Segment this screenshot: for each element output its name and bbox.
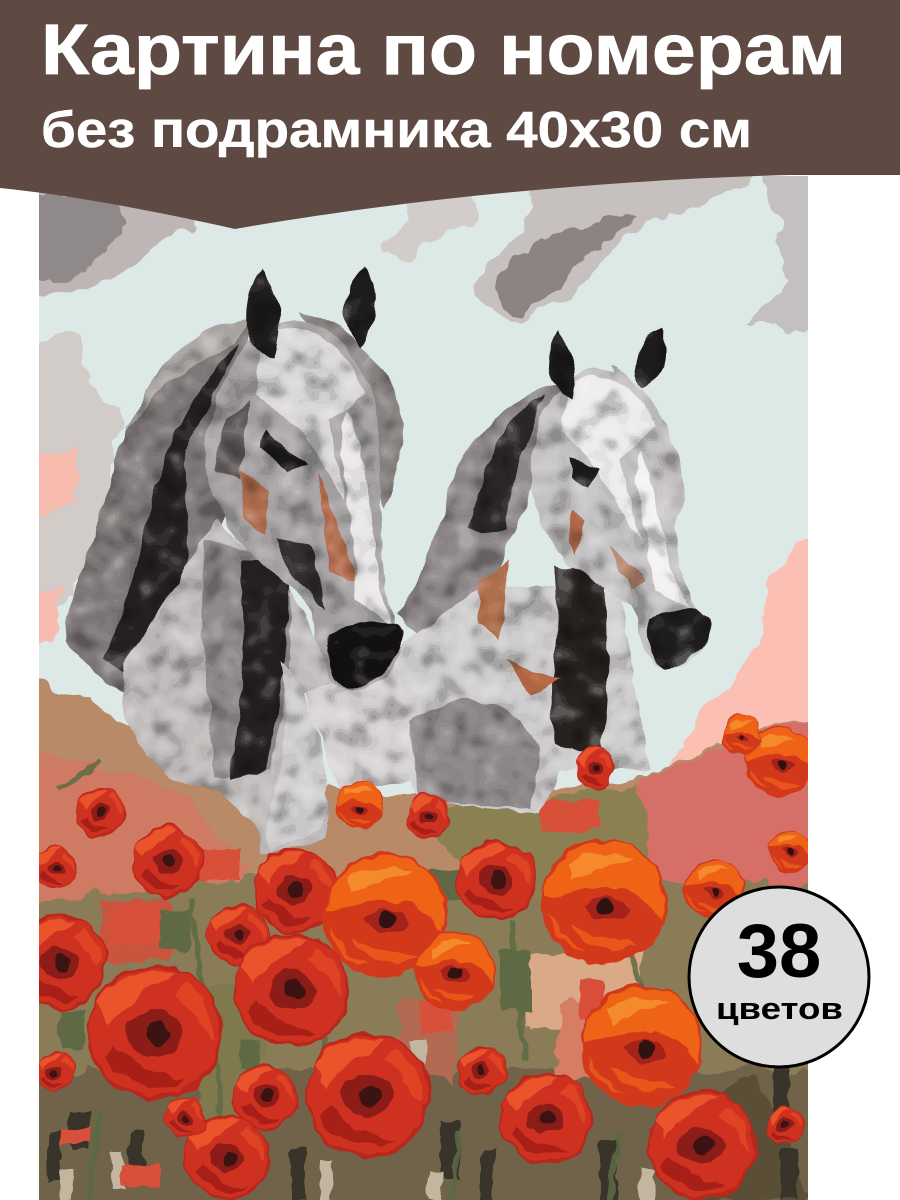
- badge: 38 colours: [689, 887, 869, 1067]
- right horse head: [532, 328, 711, 670]
- sky: [39, 176, 808, 798]
- left horse mane: [65, 310, 405, 700]
- title: Картина по номерам: [41, 11, 846, 90]
- pink horizon: [668, 538, 808, 767]
- meadow: [25, 680, 820, 1200]
- horse: right: [290, 328, 711, 815]
- subtitle: без подрамника 40х30 см: [41, 101, 752, 158]
- painting: [12, 165, 820, 1200]
- stems and grass: [60, 760, 640, 1200]
- left horse body: [122, 520, 340, 855]
- header banner: [0, 0, 900, 229]
- badge: 38 colours: 38: [737, 909, 821, 994]
- badge: 38 colours: цветов: [716, 991, 843, 1026]
- left horse head: [206, 267, 405, 690]
- horse: left: [65, 267, 405, 855]
- right horse mane: [395, 365, 685, 635]
- clouds: [25, 165, 820, 640]
- meadow dabs: [48, 780, 798, 1200]
- right horse body: [290, 560, 650, 815]
- poppies: [12, 715, 815, 1200]
